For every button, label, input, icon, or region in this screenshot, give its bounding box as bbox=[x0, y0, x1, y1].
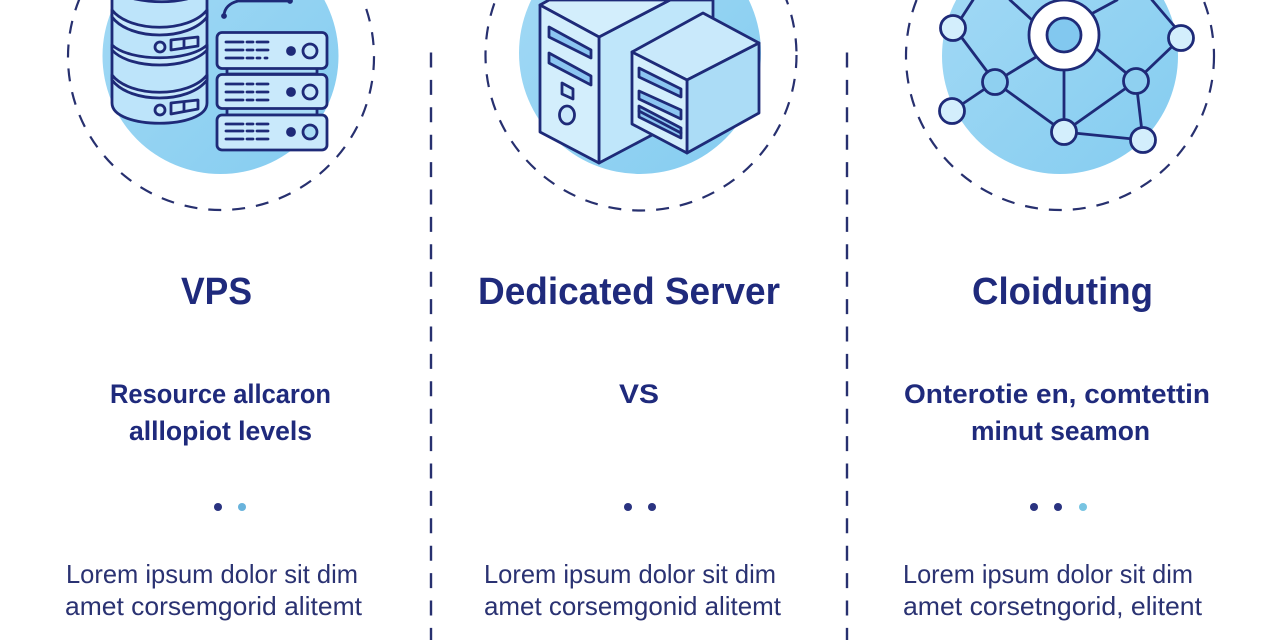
body text: VPS: amet corsemgorid alitemt bbox=[65, 591, 363, 621]
heading: Cloud: Cloiduting bbox=[972, 271, 1153, 313]
panel: Dedicated Server column bbox=[478, 0, 796, 621]
network links bbox=[952, 0, 1181, 140]
icon: server racks bbox=[217, 32, 327, 150]
subheading: Cloud: Onterotie en, comtettin bbox=[904, 379, 1210, 409]
dots: Dedicated Server bbox=[624, 503, 656, 511]
body text: Cloud bbox=[903, 559, 1203, 621]
icon: VPS database and server racks bbox=[68, 0, 374, 210]
subheading: VPS: Resource allcaron bbox=[110, 379, 331, 409]
dots: Cloud bbox=[1030, 503, 1087, 511]
body text: VPS bbox=[65, 559, 363, 621]
body text: Dedicated Server bbox=[484, 559, 782, 621]
body text: Dedicated Server: amet corsemgonid alitemt bbox=[484, 591, 782, 621]
subheading: Cloud: minut seamon bbox=[971, 416, 1150, 446]
subheading: VPS bbox=[110, 379, 331, 446]
body text: Cloud: Lorem ipsum dolor sit dim bbox=[903, 559, 1193, 589]
body text: VPS: Lorem ipsum dolor sit dim bbox=[66, 559, 358, 589]
central hub bbox=[1029, 0, 1099, 70]
icon: network connector bbox=[222, 0, 292, 18]
panel: VPS column bbox=[65, 0, 374, 621]
subheading: VS: VS bbox=[619, 379, 659, 409]
body text: Dedicated Server: Lorem ipsum dolor sit dim bbox=[484, 559, 776, 589]
dots: VPS bbox=[214, 503, 246, 511]
divider: left bbox=[430, 52, 432, 640]
icon: cloud network bbox=[906, 0, 1214, 210]
icon: tower server bbox=[540, 0, 713, 163]
heading: VPS: VPS bbox=[181, 271, 252, 313]
icon: dedicated server boxes bbox=[486, 0, 796, 210]
subheading: Cloud bbox=[904, 379, 1210, 446]
subheading: VPS: alllopiot levels bbox=[129, 416, 312, 446]
icon: database cylinder bbox=[112, 0, 207, 123]
body text: Cloud: amet corsetngorid, elitent bbox=[903, 591, 1203, 621]
panel: Cloud column bbox=[903, 0, 1214, 621]
heading: Dedicated Server: Dedicated Server bbox=[478, 271, 780, 313]
divider: right bbox=[846, 52, 848, 640]
outer nodes bbox=[940, 16, 1194, 152]
icon: small server box bbox=[632, 13, 759, 153]
